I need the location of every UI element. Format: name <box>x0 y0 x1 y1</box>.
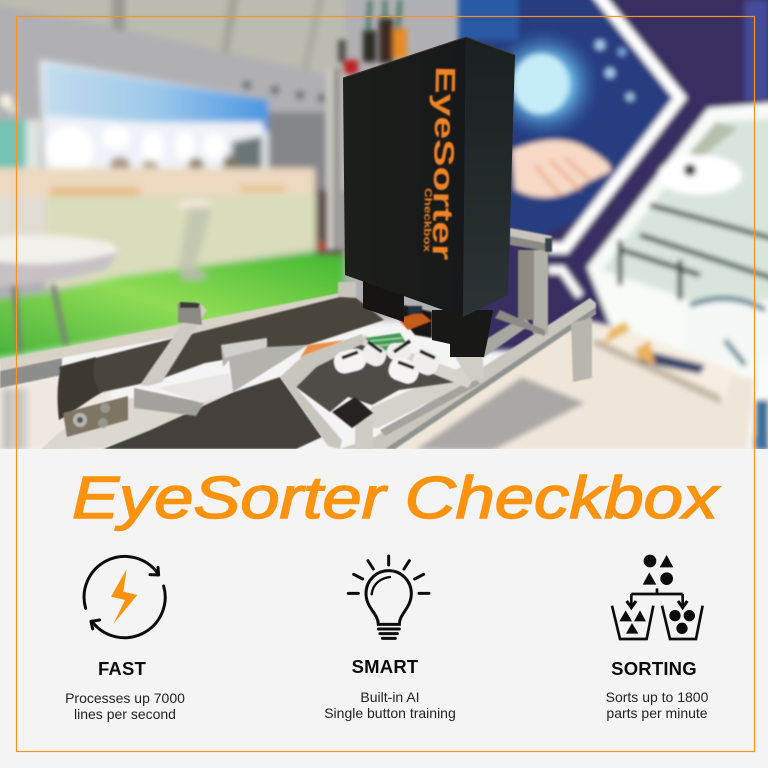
fast heading: FAST <box>98 658 146 679</box>
device logo text: Checkbox <box>421 188 433 253</box>
conveyor rail <box>0 282 356 388</box>
sorting description: Sorts up to 1800 <box>606 689 708 705</box>
smart description: Built-in AI <box>360 689 420 705</box>
upper conveyor belt <box>58 297 384 420</box>
title: EyeSorter Checkbox <box>72 465 721 531</box>
fast description: Processes up 7000 <box>65 690 185 706</box>
cables and mounting hardware <box>326 0 407 250</box>
bottom light panel <box>0 449 768 768</box>
table surface left of conveyor <box>0 370 110 450</box>
orange connector block <box>398 305 432 338</box>
smart description: Single button training <box>324 704 456 720</box>
floor and booklets <box>380 318 755 450</box>
smart description <box>324 689 456 721</box>
photo: EyeSorter device on conveyor at trade show <box>0 0 768 449</box>
smart heading: SMART <box>352 656 418 677</box>
fast description <box>65 690 185 722</box>
sorting description: parts per minute <box>606 704 708 720</box>
trade show hall background <box>0 0 470 360</box>
metal deflector guides <box>134 301 345 416</box>
round table in foreground <box>0 235 118 352</box>
lower conveyor belt <box>40 377 322 450</box>
roller end bracket <box>63 396 128 437</box>
sensor tray with parts <box>280 333 484 449</box>
sorting heading: SORTING <box>611 658 697 679</box>
support post <box>495 228 552 336</box>
device logo text: EyeSorter <box>427 66 461 261</box>
sorting description <box>606 689 708 721</box>
device logo text <box>421 66 461 261</box>
black EyeSorter Checkbox housing <box>343 37 515 357</box>
fast description: lines per second <box>74 706 176 722</box>
right conveyor frame rails <box>340 298 596 450</box>
digital backdrop with AI imagery <box>458 0 768 450</box>
